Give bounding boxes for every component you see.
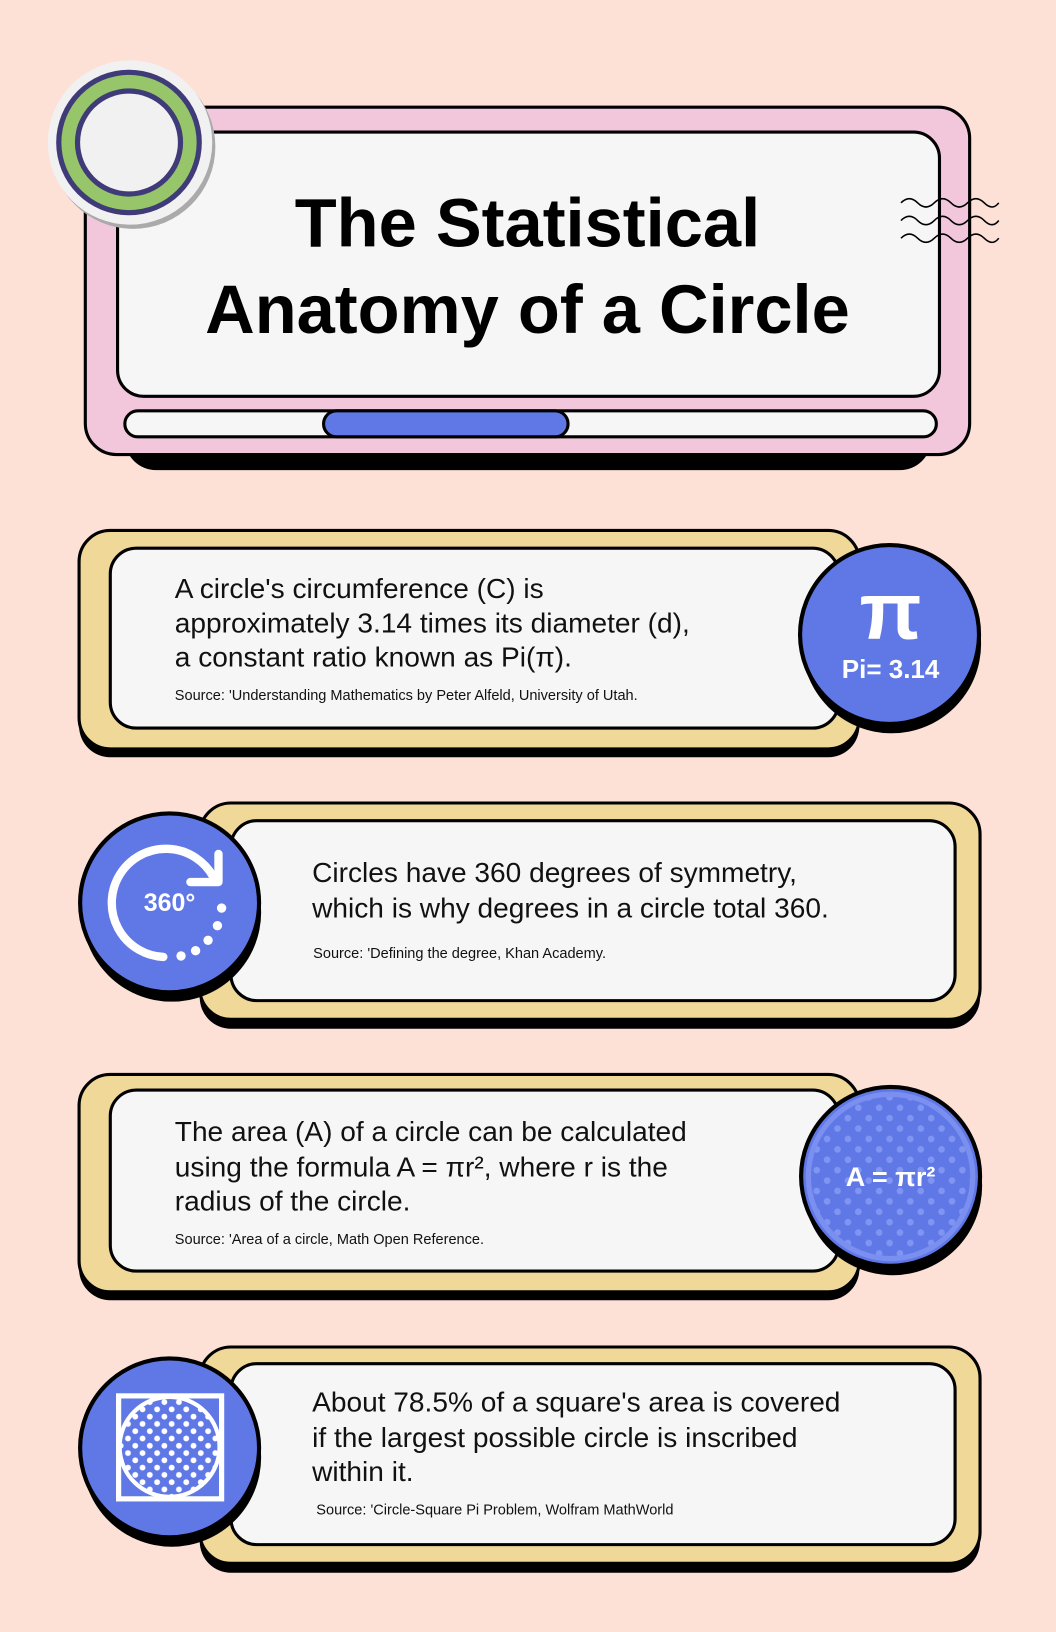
icon: pi: π — [860, 567, 922, 657]
text block: approximately 3.14 times its diameter (d), — [175, 607, 690, 638]
text block — [311, 1386, 840, 1518]
text block: which is why degrees in a circle total 360. — [311, 892, 829, 923]
text block: if the largest possible circle is inscribed — [312, 1422, 798, 1453]
icon: 360: 360° — [144, 889, 195, 917]
icon: area formula: A = πr² — [846, 1162, 935, 1192]
text block: Source: 'Understanding Mathematics by Peter Alfeld, University of Utah. — [175, 688, 638, 704]
text block: radius of the circle. — [175, 1186, 410, 1217]
text block — [175, 1116, 687, 1248]
text block — [311, 857, 829, 962]
icon: ring — [48, 60, 215, 229]
title: The Statistical — [295, 185, 760, 262]
icon: pi — [800, 545, 981, 733]
title panel — [48, 60, 999, 470]
text block: A circle's circumference (C) is — [175, 573, 544, 604]
icon: 360 — [80, 813, 261, 1002]
text block: Source: 'Defining the degree, Khan Academy. — [313, 946, 606, 962]
text block: The area (A) of a circle can be calculated — [175, 1116, 687, 1147]
panel: area — [79, 1074, 982, 1300]
title panel: Anatomy of a Circle — [205, 271, 850, 348]
progress bar — [125, 411, 936, 437]
icon: inscribed circle — [80, 1358, 261, 1547]
panel: symmetry — [80, 803, 980, 1029]
panel: square coverage — [80, 1347, 980, 1573]
icon: waves — [901, 199, 999, 242]
text block: Source: 'Circle-Square Pi Problem, Wolfram MathWorld — [316, 1502, 673, 1518]
icon: area formula — [801, 1087, 982, 1275]
panel: circumference — [79, 530, 981, 757]
text block: a constant ratio known as Pi(π). — [175, 642, 572, 673]
text block: Source: 'Area of a circle, Math Open Reference. — [175, 1232, 484, 1248]
text block: using the formula A = πr², where r is the — [175, 1151, 668, 1182]
text block: About 78.5% of a square's area is covered — [312, 1386, 840, 1417]
icon: pi: Pi= 3.14 — [842, 654, 940, 684]
text block: within it. — [311, 1456, 414, 1487]
text block — [175, 573, 690, 704]
text block: Circles have 360 degrees of symmetry, — [312, 857, 797, 888]
